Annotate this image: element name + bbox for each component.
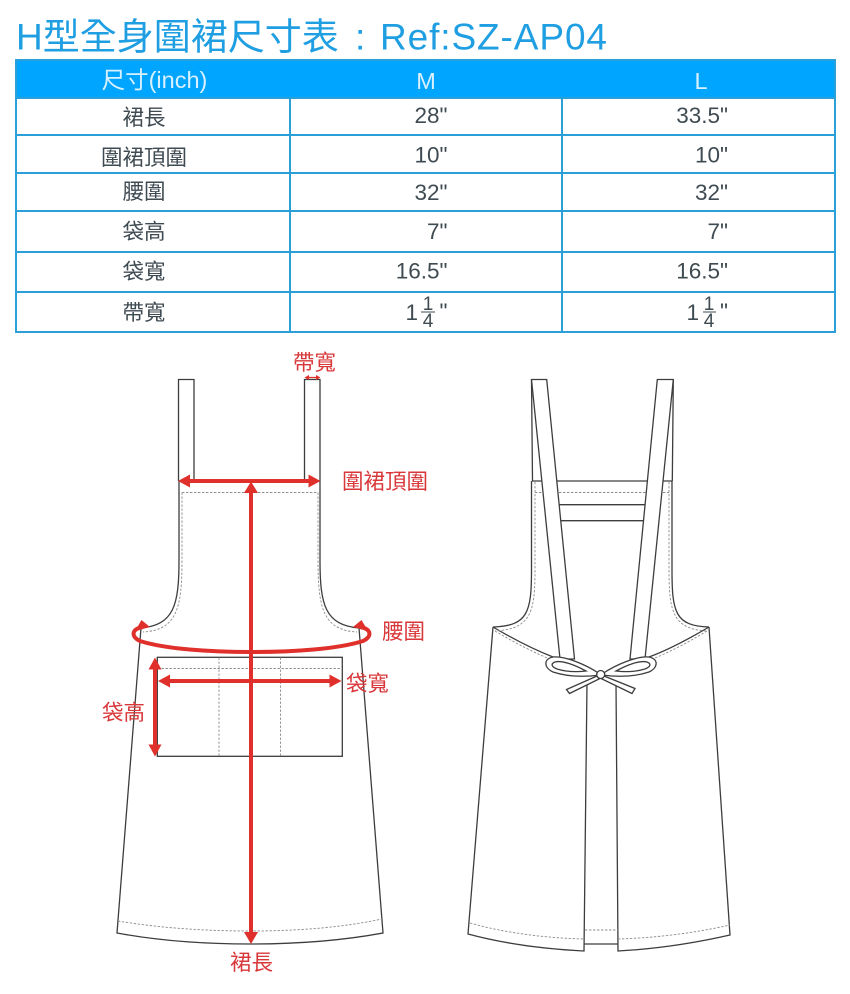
measurement arrows	[134, 375, 369, 944]
label: pocket height: 袋高	[102, 701, 145, 725]
title: H型全身圍裙尺寸表	[16, 16, 339, 58]
front apron drawing	[117, 380, 383, 944]
stitching	[118, 492, 382, 931]
arrow: pocket width	[158, 674, 342, 688]
arrow: apron length	[244, 482, 258, 944]
table header row	[16, 60, 835, 98]
title: Ref:SZ-AP04	[380, 16, 607, 58]
row: apron length: 28"	[414, 103, 448, 128]
bow knot	[597, 670, 605, 678]
right loop opening	[616, 662, 650, 672]
right bow loop	[602, 657, 656, 676]
row: waist	[122, 180, 728, 205]
title	[16, 16, 607, 58]
row: bib top width	[101, 142, 728, 170]
row: strap width: 1	[686, 300, 699, 325]
label: pocket width: 袋寬	[346, 672, 389, 696]
row: strap width: 1	[704, 294, 714, 315]
row: strap width: 帶寬	[122, 301, 166, 325]
bow tails	[566, 676, 635, 694]
size table	[16, 60, 835, 332]
row: strap width: 4	[423, 311, 434, 332]
table header row: M	[416, 68, 436, 94]
label: apron length: 裙長	[230, 951, 273, 975]
row: apron length: 33.5"	[676, 103, 728, 128]
row: bib top width: 10"	[695, 142, 728, 168]
row: bib top width: 圍裙頂圍	[101, 146, 187, 170]
row: pocket width: 16.5"	[396, 258, 448, 284]
arrow: waist loop	[134, 620, 369, 652]
row: waist: 腰圍	[122, 180, 166, 204]
arrow: strap width	[304, 375, 320, 380]
apron body outline	[117, 481, 383, 944]
row: strap width: "	[440, 299, 448, 324]
arrow: pocket height	[148, 658, 162, 756]
table grid	[16, 60, 835, 332]
row: pocket height	[122, 219, 728, 244]
label: bib top width: 圍裙頂圍	[342, 470, 428, 494]
row: apron length	[122, 103, 728, 130]
title: :	[355, 16, 365, 58]
row: pocket width	[122, 258, 728, 284]
table header row: 尺寸(inch)	[102, 67, 207, 93]
back body outline	[468, 481, 730, 951]
row: pocket width: 袋寬	[122, 260, 166, 284]
back apron drawing	[468, 380, 730, 951]
row: pocket height: 7"	[427, 219, 448, 244]
row: waist: 32"	[695, 180, 728, 205]
right front strap	[304, 380, 320, 481]
front pocket	[157, 657, 342, 756]
row: pocket width: 16.5"	[676, 258, 728, 284]
row: strap width: 1	[423, 294, 433, 315]
left front strap	[178, 380, 194, 481]
row: strap width: "	[720, 299, 728, 324]
rear strap edges	[532, 380, 673, 481]
row: strap width: 1	[405, 300, 418, 325]
row: apron length: 裙長	[122, 106, 166, 130]
table header row: L	[694, 68, 708, 94]
left crossing strap	[532, 380, 574, 659]
row: strap width	[122, 294, 728, 332]
row: pocket height: 7"	[707, 219, 728, 244]
back waist edges	[493, 627, 709, 657]
right crossing strap	[630, 380, 673, 659]
row: pocket height: 袋高	[122, 220, 166, 244]
row: bib top width: 10"	[414, 142, 448, 168]
bow tie	[546, 657, 656, 694]
arrow: bib top width	[178, 474, 320, 488]
row: strap width: 4	[704, 311, 715, 332]
left bow loop	[546, 657, 600, 676]
label: strap width: 帶寬	[293, 351, 336, 375]
left loop opening	[552, 662, 586, 672]
row: waist: 32"	[414, 180, 448, 205]
back band lines	[555, 505, 650, 521]
label: waist: 腰圍	[382, 620, 425, 644]
back stitching	[470, 482, 730, 939]
